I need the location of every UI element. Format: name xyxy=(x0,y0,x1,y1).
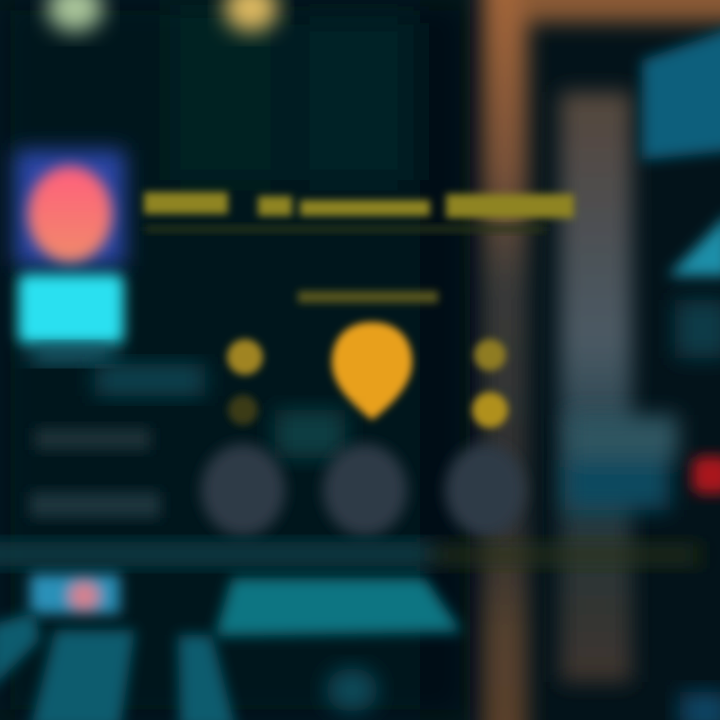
icon: top light green xyxy=(47,0,103,32)
teal glow centre xyxy=(275,410,345,458)
panel: teal block top right xyxy=(642,25,720,160)
panel: left pink card xyxy=(15,150,125,266)
panel: bottom teal shape xyxy=(215,578,462,636)
label above pin xyxy=(298,291,438,303)
icon: yellow dot right xyxy=(474,339,506,371)
icon: yellow location pin xyxy=(332,322,412,420)
panel: left cyan card xyxy=(18,274,124,344)
panel: teal block right xyxy=(675,300,720,358)
left grey bar xyxy=(35,428,150,450)
left grey bar lower xyxy=(30,492,160,518)
icon: dim dot left xyxy=(228,395,258,425)
left cyan card glow xyxy=(30,345,115,363)
icon: grey dome left xyxy=(201,444,285,536)
icon: pink circle xyxy=(28,166,112,262)
icon: top light yellow xyxy=(224,0,278,32)
background columns xyxy=(0,0,470,720)
panel: grey door xyxy=(560,92,632,682)
panel: bottom left teal strips xyxy=(0,612,236,720)
icon: teal triangle right xyxy=(668,212,720,276)
icon: grey dome centre xyxy=(323,444,407,536)
panel: bottom right teal xyxy=(680,692,720,720)
icon: yellow dot right lower xyxy=(472,392,508,428)
icon: bottom left card xyxy=(30,574,120,614)
panel: bottom centre teal xyxy=(326,668,378,712)
icon: yellow dot left xyxy=(227,339,263,375)
icon: red marker xyxy=(692,456,720,494)
panel: brown door frame xyxy=(482,0,720,720)
icon: grey dome right xyxy=(445,444,525,536)
title underline xyxy=(145,226,545,232)
panel: teal block lower right xyxy=(565,415,678,510)
title xyxy=(144,192,574,218)
band: horizontal strip xyxy=(0,542,700,566)
left teal bar xyxy=(95,364,205,396)
